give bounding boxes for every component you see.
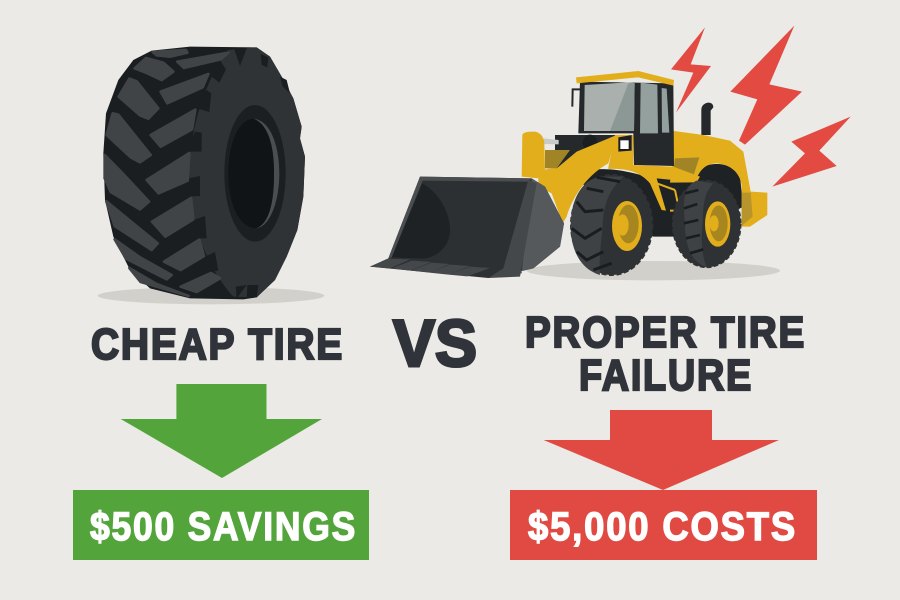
engine bay behind arm bbox=[555, 135, 617, 168]
dark chassis and wheel arches bbox=[580, 164, 743, 237]
arrow: red down bbox=[544, 410, 779, 490]
heading: proper tire failure: PROPER TIRE bbox=[525, 308, 806, 357]
cab roof bbox=[576, 71, 674, 86]
callout: $5,000 costs bbox=[510, 490, 817, 560]
lift tower bbox=[522, 132, 545, 178]
heading: proper tire failure bbox=[525, 308, 806, 400]
icon: wheel loader bbox=[370, 26, 851, 280]
engine body bbox=[670, 131, 767, 227]
heading: cheap tire: CHEAP TIRE bbox=[91, 320, 344, 369]
lightning bolt 3 bbox=[772, 117, 851, 187]
arrow: green down bbox=[121, 384, 322, 478]
lightning bolt 2 bbox=[730, 26, 802, 145]
cab bbox=[578, 82, 674, 166]
icon: cheap tire bbox=[98, 47, 324, 304]
callout: $5,000 costs: $5,000 COSTS bbox=[528, 505, 797, 549]
bucket bbox=[370, 177, 564, 278]
frame and ladder bbox=[608, 135, 700, 211]
callout: $500 savings: $500 SAVINGS bbox=[90, 505, 357, 549]
front wheel bbox=[571, 175, 652, 275]
loader arm bbox=[538, 135, 617, 223]
heading: vs: VS bbox=[393, 306, 477, 380]
exhaust stack bbox=[701, 103, 713, 135]
lightning bolt 1 bbox=[671, 27, 711, 113]
rear wheel bbox=[673, 181, 741, 267]
callout: $500 savings bbox=[73, 490, 369, 560]
heading: proper tire failure: FAILURE bbox=[579, 351, 753, 400]
